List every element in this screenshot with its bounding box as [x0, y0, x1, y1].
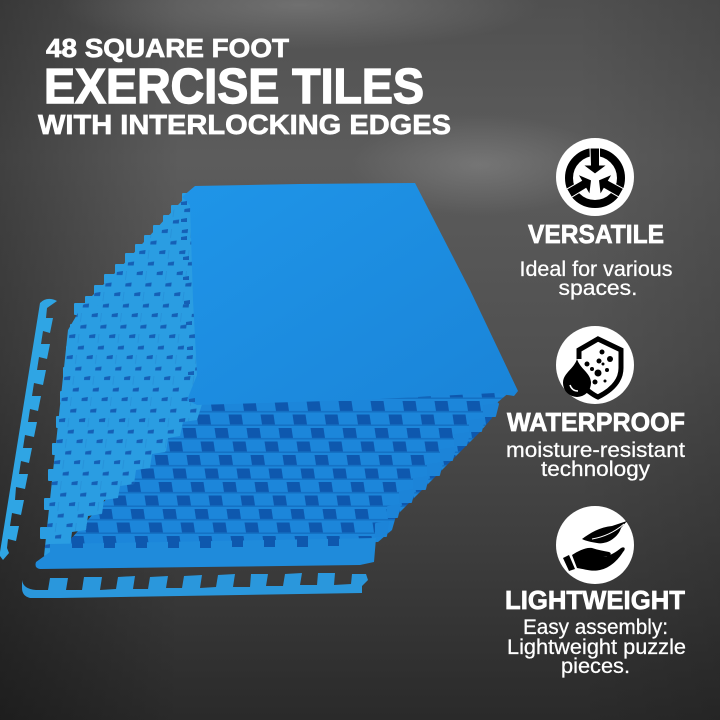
icon: three inward arrows — [556, 138, 634, 216]
feature: versatile — [520, 138, 672, 300]
title line 3: WITH INTERLOCKING EDGES — [38, 109, 451, 140]
description: versatile: Ideal for various — [520, 258, 672, 281]
notches along the top face edge — [181, 201, 195, 402]
feature: lightweight — [505, 506, 686, 678]
feature: waterproof — [506, 326, 685, 481]
bottom border strip — [22, 573, 368, 598]
description: lightweight — [507, 616, 686, 678]
light left side of stack — [41, 192, 205, 556]
description: lightweight: Easy assembly: — [523, 616, 668, 639]
title — [38, 35, 451, 140]
description: waterproof: technology — [541, 458, 651, 481]
description: lightweight: Lightweight puzzle — [507, 636, 686, 659]
description: versatile: spaces. — [558, 277, 638, 300]
top face of the mat — [182, 183, 518, 405]
foam tile stack — [36, 183, 518, 569]
bottom row of teeth — [72, 536, 339, 548]
icon: shield and water drop — [556, 326, 634, 404]
title line 2: EXERCISE TILES — [44, 60, 424, 114]
bottom base tile — [36, 538, 376, 569]
description: lightweight: pieces. — [561, 655, 630, 678]
left border strip — [0, 299, 57, 560]
heading: versatile: VERSATILE — [528, 219, 664, 249]
description: waterproof — [506, 439, 685, 481]
heading: lightweight: LIGHTWEIGHT — [505, 585, 685, 615]
description: versatile — [520, 258, 672, 300]
description: waterproof: moisture-resistant — [506, 439, 685, 462]
icon: feather over open hand — [556, 506, 634, 584]
dark interlocking teeth, lower stack — [70, 390, 512, 552]
title line 1: 48 SQUARE FOOT — [46, 35, 289, 63]
heading: waterproof: WATERPROOF — [507, 407, 685, 437]
